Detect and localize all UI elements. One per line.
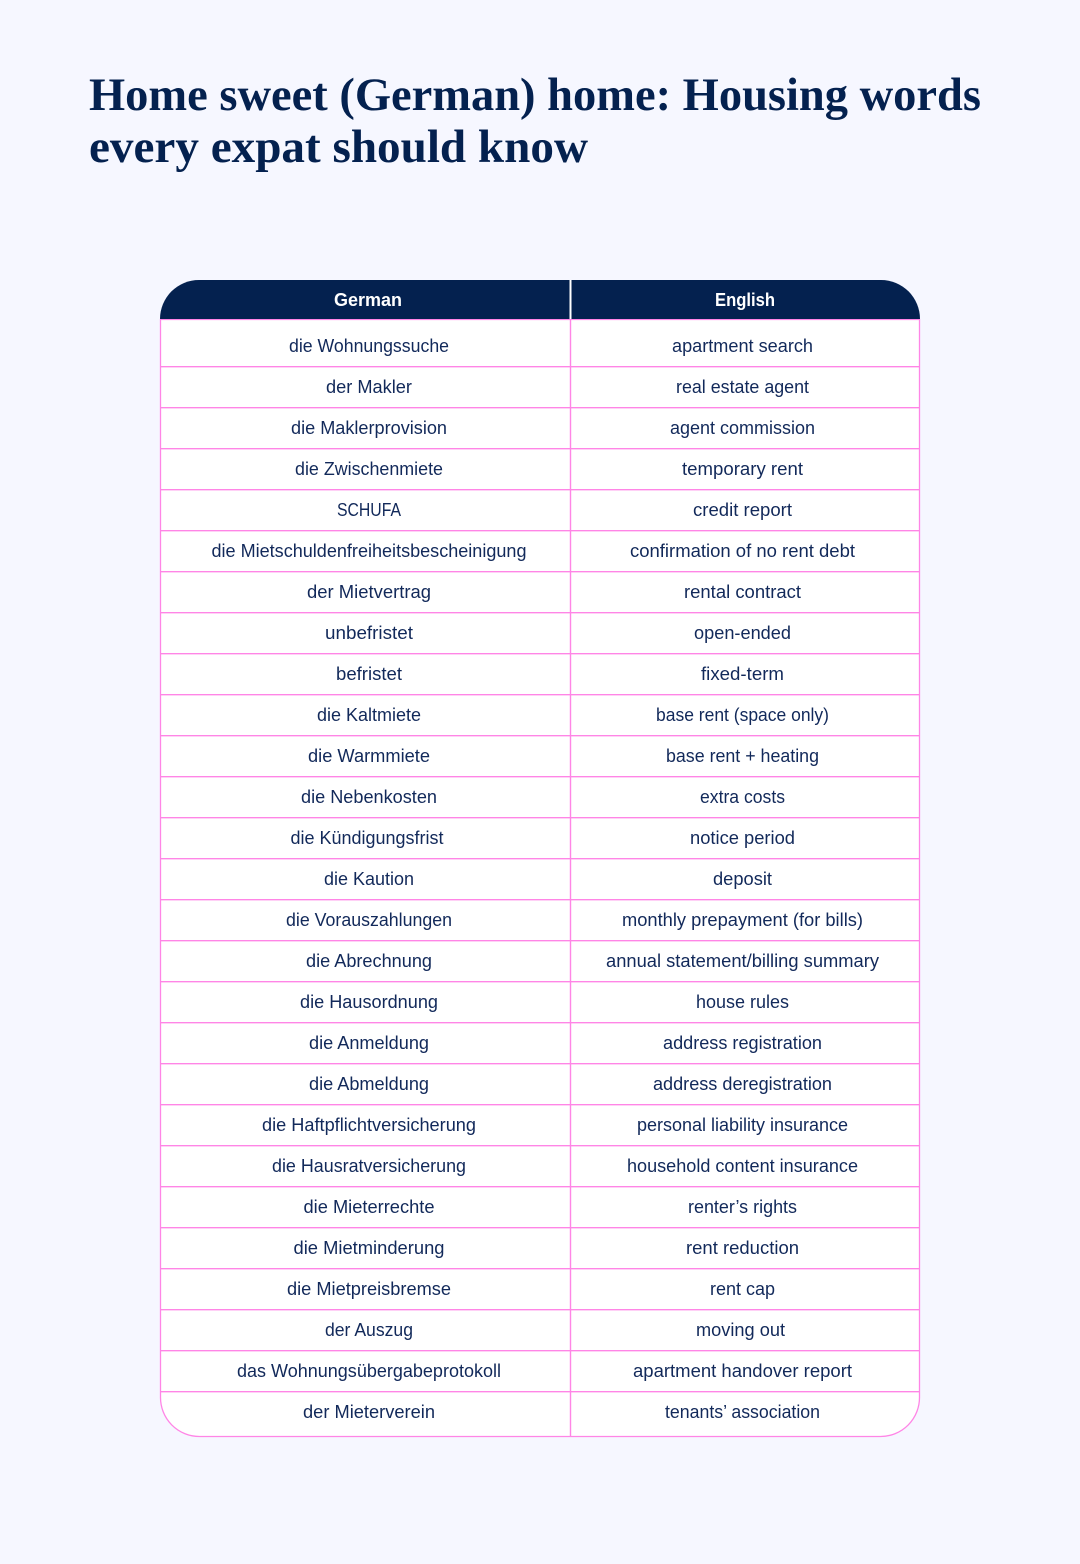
row 10 bbox=[317, 704, 829, 725]
row 24: die Mietpreisbremse bbox=[287, 1278, 451, 1299]
row 23 bbox=[294, 1237, 799, 1258]
row 1: die Wohnungssuche bbox=[289, 335, 449, 356]
row 14: deposit bbox=[713, 868, 772, 889]
row 15: die Vorauszahlungen bbox=[286, 909, 452, 930]
row 24: rent cap bbox=[710, 1278, 775, 1299]
row 14: die Kaution bbox=[324, 868, 414, 889]
row 1 bbox=[289, 335, 813, 356]
row 6 bbox=[212, 540, 855, 561]
row 5: credit report bbox=[693, 499, 792, 520]
row 26: das Wohnungsübergabeprotokoll bbox=[237, 1360, 501, 1381]
row 16 bbox=[306, 950, 880, 971]
row 20 bbox=[262, 1114, 848, 1135]
row 19 bbox=[309, 1073, 832, 1094]
row 11: base rent + heating bbox=[666, 745, 819, 766]
row 15: monthly prepayment (for bills) bbox=[622, 909, 863, 930]
row 8 bbox=[325, 622, 791, 643]
row 17: die Hausordnung bbox=[300, 991, 438, 1012]
row 23: die Mietminderung bbox=[294, 1237, 444, 1258]
row 8: unbefristet bbox=[325, 622, 413, 643]
row 23: rent reduction bbox=[686, 1237, 799, 1258]
row 19: die Abmeldung bbox=[309, 1073, 429, 1094]
row 2: real estate agent bbox=[676, 376, 809, 397]
table body panel bbox=[160, 320, 920, 1436]
row 1: apartment search bbox=[672, 335, 813, 356]
row 4: die Zwischenmiete bbox=[295, 458, 443, 479]
title: every expat should know bbox=[89, 121, 588, 173]
row 17 bbox=[300, 991, 789, 1012]
row 27 bbox=[303, 1401, 820, 1422]
row 20: die Haftpflichtversicherung bbox=[262, 1114, 476, 1135]
row 11: die Warmmiete bbox=[308, 745, 430, 766]
row 25 bbox=[325, 1319, 785, 1340]
row 24 bbox=[287, 1278, 775, 1299]
row 27: tenants’ association bbox=[665, 1401, 820, 1422]
row 17: house rules bbox=[696, 991, 789, 1012]
row 26: apartment handover report bbox=[633, 1360, 852, 1381]
row 12: die Nebenkosten bbox=[301, 786, 437, 807]
row 20: personal liability insurance bbox=[637, 1114, 848, 1135]
table header bbox=[160, 280, 920, 319]
row 11 bbox=[308, 745, 819, 766]
row 22: die Mieterrechte bbox=[304, 1196, 434, 1217]
vocabulary table bbox=[160, 280, 920, 1436]
row 12: extra costs bbox=[700, 786, 785, 807]
row 8: open-ended bbox=[694, 622, 791, 643]
row 25: moving out bbox=[696, 1319, 785, 1340]
row 26 bbox=[237, 1360, 852, 1381]
row 13: notice period bbox=[690, 827, 795, 848]
row 10: base rent (space only) bbox=[656, 704, 829, 725]
row 9: fixed-term bbox=[701, 663, 784, 684]
table header: German bbox=[334, 290, 402, 310]
row 19: address deregistration bbox=[653, 1073, 832, 1094]
row 4: temporary rent bbox=[682, 458, 803, 479]
row 6: die Mietschuldenfreiheitsbescheinigung bbox=[212, 540, 526, 561]
row 5: SCHUFA bbox=[337, 499, 402, 520]
row 15 bbox=[286, 909, 863, 930]
row 21 bbox=[272, 1155, 858, 1176]
row 6: confirmation of no rent debt bbox=[630, 540, 855, 561]
row 4 bbox=[295, 458, 803, 479]
row 7: rental contract bbox=[684, 581, 801, 602]
row 18 bbox=[309, 1032, 822, 1053]
row 9: befristet bbox=[336, 663, 402, 684]
row 13 bbox=[290, 827, 795, 848]
table header: English bbox=[715, 290, 775, 310]
row 16: annual statement/billing summary bbox=[606, 950, 880, 971]
row 22 bbox=[304, 1196, 797, 1217]
row 7 bbox=[307, 581, 801, 602]
title: Home sweet (German) home: Housing words bbox=[89, 69, 981, 121]
row 2: der Makler bbox=[326, 376, 412, 397]
row 18: die Anmeldung bbox=[309, 1032, 429, 1053]
row 22: renter’s rights bbox=[688, 1196, 797, 1217]
row 3: agent commission bbox=[670, 417, 815, 438]
row 16: die Abrechnung bbox=[306, 950, 432, 971]
row 27: der Mieterverein bbox=[303, 1401, 435, 1422]
row 21: die Hausratversicherung bbox=[272, 1155, 466, 1176]
row 3: die Maklerprovision bbox=[291, 417, 447, 438]
row 18: address registration bbox=[663, 1032, 822, 1053]
row 25: der Auszug bbox=[325, 1319, 413, 1340]
row 13: die Kündigungsfrist bbox=[290, 827, 444, 848]
row 5 bbox=[337, 499, 792, 520]
row 7: der Mietvertrag bbox=[307, 581, 431, 602]
row 12 bbox=[301, 786, 785, 807]
row 3 bbox=[291, 417, 815, 438]
row 14 bbox=[324, 868, 772, 889]
row 9 bbox=[336, 663, 784, 684]
row 21: household content insurance bbox=[627, 1155, 858, 1176]
row 2 bbox=[326, 376, 809, 397]
row 10: die Kaltmiete bbox=[317, 704, 421, 725]
title bbox=[89, 69, 981, 173]
